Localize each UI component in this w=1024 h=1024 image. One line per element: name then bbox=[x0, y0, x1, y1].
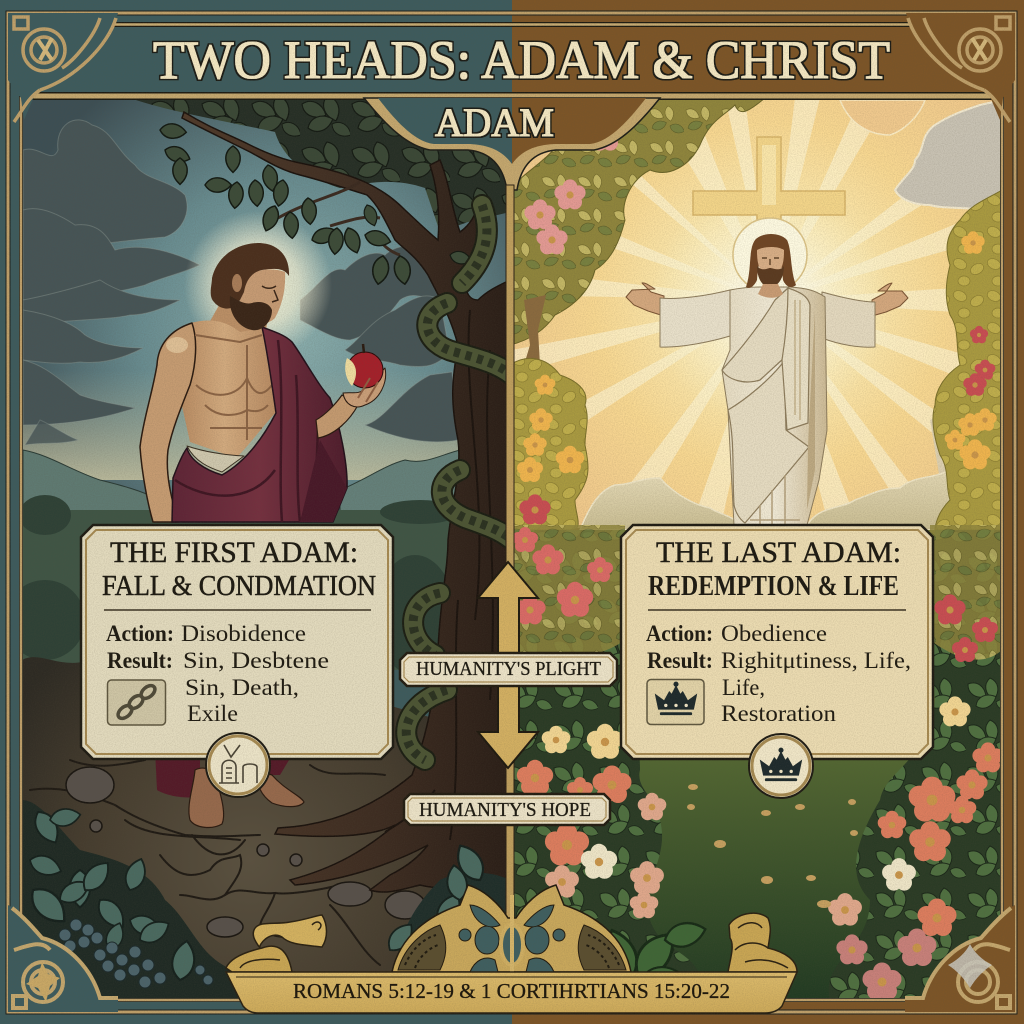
body text: Sin, Death, bbox=[185, 675, 299, 700]
subheading: FALL & CONDMATION bbox=[102, 571, 376, 602]
body text: Disobidence bbox=[181, 621, 306, 646]
heading: THE FIRST ADAM: bbox=[110, 536, 358, 569]
warm foliage above garden beds bbox=[510, 525, 1002, 660]
left canopy bbox=[510, 98, 765, 345]
corner ornament top left bbox=[8, 13, 118, 122]
icon: crown box bbox=[647, 680, 704, 724]
left lower bush bbox=[510, 358, 588, 530]
raised forearm bbox=[316, 395, 358, 438]
neck bbox=[210, 306, 267, 345]
cross of light bbox=[693, 137, 845, 226]
label: Humanity's Plight bbox=[400, 653, 617, 686]
right upper bush bbox=[933, 190, 1002, 530]
facial features bbox=[262, 286, 278, 302]
body text: Exile bbox=[187, 701, 238, 726]
label: Humanity's Hope: HUMANITY'S HOPE bbox=[419, 799, 591, 821]
icon: crown medallion bbox=[749, 734, 813, 798]
corner ornament top right bbox=[906, 13, 1015, 122]
body text: Obedience bbox=[721, 621, 827, 646]
hair bbox=[211, 243, 289, 309]
pale clouds bbox=[840, 100, 1002, 480]
gold ornament medallion bbox=[392, 885, 631, 972]
panel: The First Adam bbox=[81, 525, 393, 797]
body text: Sin, Desbtene bbox=[183, 648, 329, 673]
distant hills bbox=[23, 450, 149, 510]
face bbox=[757, 247, 784, 280]
lower cloak and feet bbox=[156, 760, 289, 798]
rocks bbox=[66, 767, 425, 937]
body text: Righitμtiness, Life, bbox=[721, 648, 911, 673]
icon: chain bbox=[108, 680, 166, 725]
icon: chain and tomb medallion bbox=[206, 733, 270, 797]
beard bbox=[230, 296, 272, 330]
subheading: REDEMPTION & LIFE bbox=[648, 571, 899, 602]
beard bbox=[757, 266, 784, 287]
subtitle tab: ADAM bbox=[364, 98, 660, 190]
ribbon bbox=[226, 972, 797, 1013]
face bbox=[240, 269, 285, 324]
body text: Action: bbox=[106, 621, 174, 646]
scroll curls bbox=[253, 915, 326, 948]
dark storm clouds bbox=[23, 120, 458, 445]
tree canopy bbox=[130, 98, 510, 232]
panel: Christ scene, restored garden bbox=[510, 98, 1004, 1000]
hair bbox=[746, 234, 796, 288]
draped sash bbox=[722, 288, 809, 523]
foreground dark foliage bbox=[22, 800, 510, 1000]
left arm bbox=[140, 323, 196, 522]
main title: TWO HEADS: ADAM & CHRIST bbox=[153, 30, 890, 90]
small diamond mark bottom right bbox=[948, 944, 992, 988]
meadow bbox=[620, 530, 935, 998]
meadow flowers bbox=[687, 784, 858, 908]
white robe bbox=[722, 287, 827, 525]
hands bbox=[626, 283, 664, 316]
hand and apple bbox=[343, 368, 386, 407]
dark garden beds bbox=[510, 530, 1002, 1000]
sun rays bbox=[514, 100, 960, 514]
panel: The Last Adam bbox=[621, 525, 933, 798]
body text: Life, bbox=[722, 675, 765, 700]
serpent coiled on trunk bbox=[406, 205, 512, 760]
loincloth bbox=[187, 446, 244, 472]
body text: Result: bbox=[107, 648, 173, 673]
body text: Restoration bbox=[721, 701, 837, 726]
glow behind Adam bbox=[186, 214, 330, 344]
subtitle tab: ADAM: ADAM bbox=[435, 100, 554, 145]
corner ornament bottom right bbox=[905, 905, 1015, 1012]
small tree trunk bbox=[524, 295, 546, 365]
neck bbox=[758, 284, 783, 298]
body text: Action: bbox=[646, 621, 713, 646]
facial features bbox=[762, 258, 779, 265]
central gold divider bbox=[506, 185, 514, 975]
foliage masses bbox=[510, 98, 1002, 530]
tree leaves bbox=[159, 123, 473, 286]
green midground bbox=[23, 510, 450, 670]
Christ figure bbox=[626, 218, 908, 525]
corner ornament bottom left bbox=[8, 905, 118, 1012]
double arrow: plight and hope bbox=[478, 562, 538, 768]
label: Humanity's Hope bbox=[404, 794, 610, 825]
large foreground leaves bbox=[610, 922, 707, 972]
halo bbox=[733, 218, 807, 292]
Adam figure bbox=[140, 243, 386, 827]
body text bbox=[106, 621, 329, 726]
heading: THE LAST ADAM: bbox=[656, 536, 901, 569]
torso bbox=[182, 320, 276, 458]
sleeves bbox=[660, 290, 730, 347]
maroon cloak bbox=[172, 327, 347, 522]
label: Humanity's Plight: HUMANITY'S PLIGHT bbox=[416, 658, 601, 680]
tree trunk, branches and roots bbox=[182, 112, 510, 892]
scripture scroll banner bbox=[226, 913, 797, 1013]
cracked ground bbox=[23, 657, 432, 972]
body text bbox=[646, 621, 911, 726]
panel: Adam scene, fallen world bbox=[5, 98, 512, 1000]
body text: Result: bbox=[647, 648, 713, 673]
scripture scroll banner: ROMANS 5:12-19 & 1 CORTIHRTIANS 15:20-22 bbox=[293, 979, 730, 1003]
flowers bbox=[512, 118, 1004, 1000]
misty garden clouds bbox=[580, 470, 950, 530]
